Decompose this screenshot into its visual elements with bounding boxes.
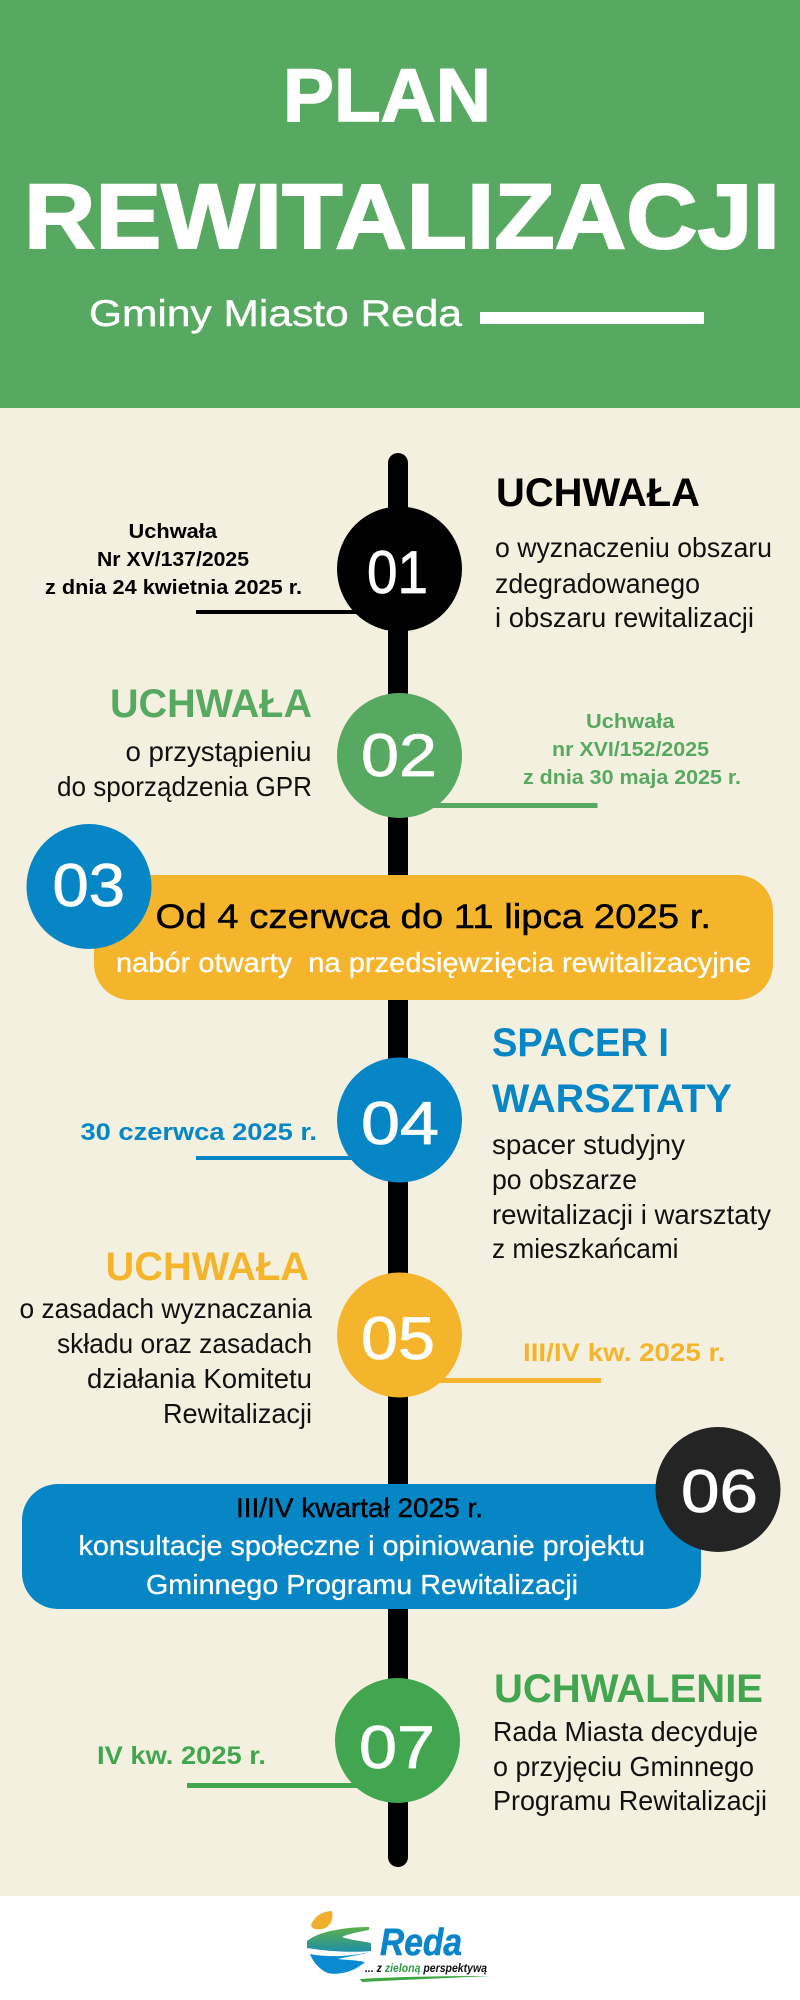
number 04: 04 <box>361 1090 439 1157</box>
description 07: Rada Miasta decyduje <box>493 1716 758 1747</box>
description 03: nabór otwarty na przedsięwzięcia rewitalizacyjne <box>116 947 751 978</box>
date 02: z dnia 30 maja 2025 r. <box>523 767 741 789</box>
description 04: spacer studyjny <box>492 1129 685 1160</box>
timeline line <box>388 453 408 1867</box>
page background <box>0 408 800 1896</box>
heading 05: UCHWAŁA <box>106 1245 309 1289</box>
header panel <box>0 0 800 408</box>
step 03 <box>26 824 773 1000</box>
circle 06 <box>656 1427 780 1552</box>
number 05: 05 <box>361 1305 435 1372</box>
step 02 <box>57 682 741 818</box>
date 07: IV kw. 2025 r. <box>97 1742 266 1770</box>
date 02: Uchwała <box>586 711 675 733</box>
circle 04 <box>337 1058 462 1182</box>
number 07: 07 <box>359 1714 435 1781</box>
description 02 <box>57 736 312 802</box>
number 06: 06 <box>681 1458 758 1525</box>
date 02: nr XVI/152/2025 <box>552 739 709 761</box>
date 01: z dnia 24 kwietnia 2025 r. <box>45 577 302 599</box>
description 05: o zasadach wyznaczania <box>20 1293 312 1324</box>
icon: sun <box>311 1911 333 1929</box>
step 04 <box>80 1021 771 1264</box>
description 04 <box>492 1129 771 1264</box>
circle 01 <box>337 506 462 632</box>
step 06 <box>22 1427 780 1609</box>
date 02 <box>523 711 741 789</box>
logo underline <box>360 1976 490 1982</box>
description 02: do sporządzenia GPR <box>57 771 312 802</box>
connector 01 <box>196 610 366 614</box>
description 01: i obszaru rewitalizacji <box>495 602 754 633</box>
logo tagline: ... z zieloną perspektywą <box>365 1961 487 1975</box>
connector 04 <box>196 1156 366 1160</box>
description 05 <box>20 1293 312 1429</box>
circle 03 <box>26 824 152 949</box>
step 01 <box>45 471 772 633</box>
step 05 <box>20 1245 726 1429</box>
title: plan: PLAN <box>283 53 491 137</box>
subtitle: Gminy Miasto Reda <box>89 293 462 334</box>
connector 02 <box>425 803 598 808</box>
description 06: Gminnego Programu Rewitalizacji <box>146 1569 578 1600</box>
title: rewitalizacji: REWITALIZACJI <box>24 166 780 268</box>
description 04: rewitalizacji i warsztaty <box>492 1199 771 1230</box>
heading 04: WARSZTATY <box>492 1077 732 1121</box>
description 04: z mieszkańcami <box>492 1233 678 1264</box>
description 05: składu oraz zasadach <box>57 1328 312 1359</box>
date 03: Od 4 czerwca do 11 lipca 2025 r. <box>156 898 711 936</box>
connector 07 <box>187 1783 367 1788</box>
description 07: o przyjęciu Gminnego <box>493 1751 754 1782</box>
pill 03 <box>94 875 773 1000</box>
icon: green swoosh <box>307 1927 371 1952</box>
circle 02 <box>337 693 462 818</box>
footer background <box>0 1896 800 2000</box>
description 01: zdegradowanego <box>495 568 700 599</box>
number 02: 02 <box>361 722 437 789</box>
heading 04: SPACER I <box>492 1021 669 1065</box>
heading 02: UCHWAŁA <box>110 682 312 726</box>
description 05: działania Komitetu <box>87 1363 312 1394</box>
circle 07 <box>335 1678 460 1803</box>
description 06: konsultacje społeczne i opiniowanie projektu <box>78 1530 645 1561</box>
heading 04 <box>492 1021 732 1121</box>
date 06: III/IV kwartał 2025 r. <box>236 1493 483 1523</box>
heading 07: UCHWALENIE <box>494 1667 763 1711</box>
connector 05 <box>430 1378 601 1383</box>
logo: Reda <box>307 1911 490 1982</box>
date 05: III/IV kw. 2025 r. <box>523 1339 726 1367</box>
icon: blue swoosh <box>310 1952 370 1974</box>
description 05: Rewitalizacji <box>163 1398 312 1429</box>
date 01 <box>45 521 302 599</box>
description 07 <box>493 1716 767 1816</box>
description 01 <box>495 532 772 633</box>
number 01: 01 <box>367 539 428 606</box>
description 02: o przystąpieniu <box>126 736 312 767</box>
number 03: 03 <box>52 852 125 919</box>
subtitle bar <box>480 312 704 324</box>
logo wordmark: Reda <box>380 1922 462 1964</box>
circle 05 <box>337 1272 462 1398</box>
description 06 <box>78 1530 645 1600</box>
pill 06 <box>22 1484 701 1609</box>
step 07 <box>97 1667 767 1816</box>
description 01: o wyznaczeniu obszaru <box>495 532 772 563</box>
date 01: Uchwała <box>128 521 218 543</box>
heading 01: UCHWAŁA <box>496 471 700 515</box>
description 04: po obszarze <box>492 1164 637 1195</box>
date 04: 30 czerwca 2025 r. <box>80 1119 317 1146</box>
date 01: Nr XV/137/2025 <box>97 549 249 571</box>
description 07: Programu Rewitalizacji <box>493 1785 767 1816</box>
